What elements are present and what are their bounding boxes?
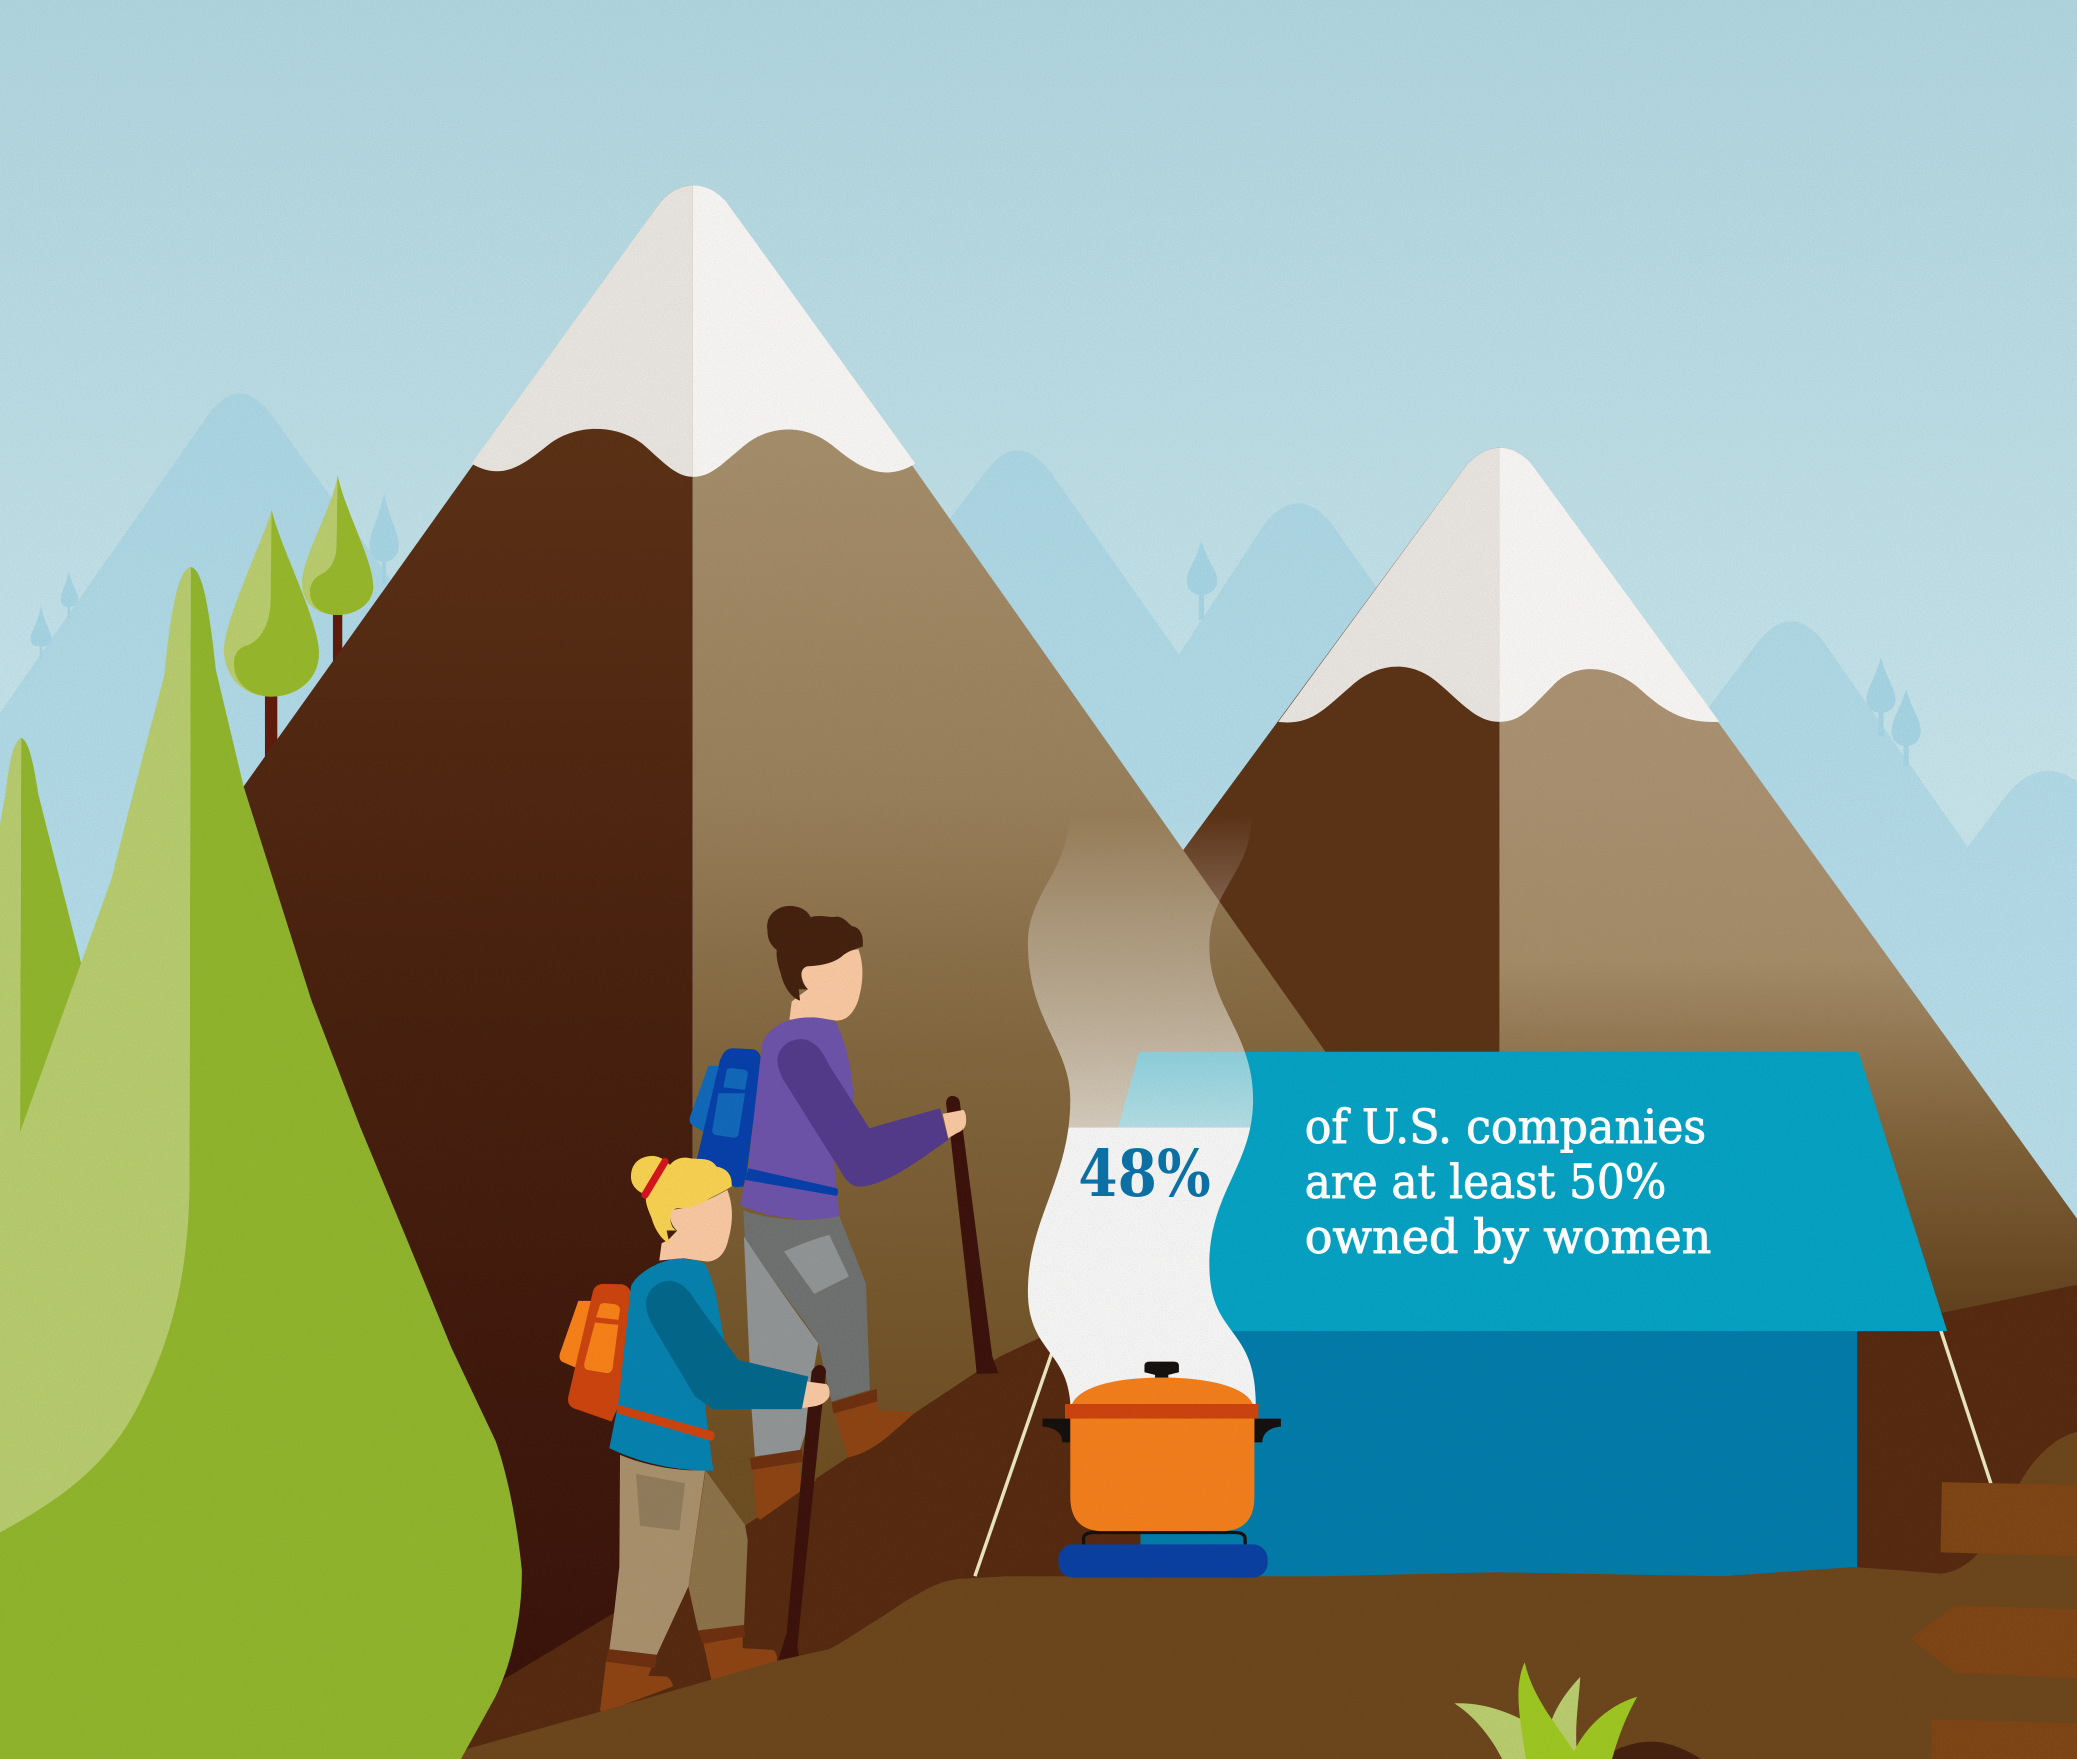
trailing boot [750, 1449, 817, 1520]
48% figure: 48% [1078, 1136, 1211, 1212]
hand [943, 1110, 966, 1138]
tent roof [1061, 1052, 1947, 1331]
backpack [690, 1048, 761, 1187]
tent [975, 1052, 1991, 1582]
foreground trees [0, 567, 522, 1759]
sweater [740, 1017, 854, 1219]
background blue trees [30, 493, 1921, 766]
second mountain [736, 448, 2077, 1457]
tree: far left dark side [20, 738, 82, 1192]
upper body [690, 906, 998, 1374]
description: owned by women [1305, 1210, 1711, 1264]
pot band [1065, 1404, 1258, 1419]
green leaves [1518, 1662, 1579, 1759]
neck and face [659, 1190, 732, 1262]
foreground ground [450, 1432, 2077, 1759]
stove burner [1084, 1533, 1245, 1544]
walking pole [778, 1365, 826, 1661]
legs and boots [600, 1455, 777, 1713]
cooking pot on stove [1042, 1362, 1281, 1578]
light leaves [1454, 1703, 1570, 1759]
sweater [609, 1259, 724, 1471]
pot handles [1042, 1419, 1281, 1442]
plant and rock [1454, 1662, 1701, 1759]
tree: large light side [0, 567, 191, 1533]
tent ropes [975, 1330, 1991, 1576]
tree: far left light side [0, 738, 21, 1192]
description [1305, 1100, 1711, 1264]
hiker: woman in purple [690, 906, 998, 1520]
small trees on slope [224, 475, 373, 762]
statistic callout [1078, 1100, 1711, 1264]
neck and face [789, 949, 862, 1021]
big mountain [242, 185, 1457, 1759]
snow cap: big mountain [472, 185, 915, 477]
sign boards [1910, 1482, 2077, 1759]
trousers [743, 1211, 870, 1456]
leading boot [832, 1389, 915, 1457]
backpack [559, 1284, 631, 1422]
smoke rising from pot [1028, 815, 1256, 1404]
stove base [1058, 1544, 1268, 1578]
hiker: girl in blue [559, 1156, 830, 1713]
upper body [559, 1156, 830, 1661]
background mountains [0, 393, 2077, 1245]
pot knob [1144, 1362, 1179, 1380]
belt strap [617, 1405, 715, 1441]
tent wall [1140, 1330, 1857, 1582]
pot body [1070, 1378, 1254, 1531]
arm [777, 1039, 948, 1187]
hand [802, 1382, 830, 1408]
description: are at least 50% [1305, 1155, 1666, 1209]
hair [767, 906, 863, 1001]
arm [646, 1281, 808, 1409]
tree: large dark side [0, 567, 522, 1759]
dark hillside path [450, 1285, 2077, 1759]
hair [631, 1156, 732, 1243]
walking pole [946, 1096, 998, 1374]
hair band [645, 1162, 665, 1195]
rock [1600, 1742, 1701, 1759]
snow cap: second mountain [1278, 448, 1719, 722]
description: of U.S. companies [1305, 1100, 1706, 1154]
belt strap [745, 1168, 838, 1196]
